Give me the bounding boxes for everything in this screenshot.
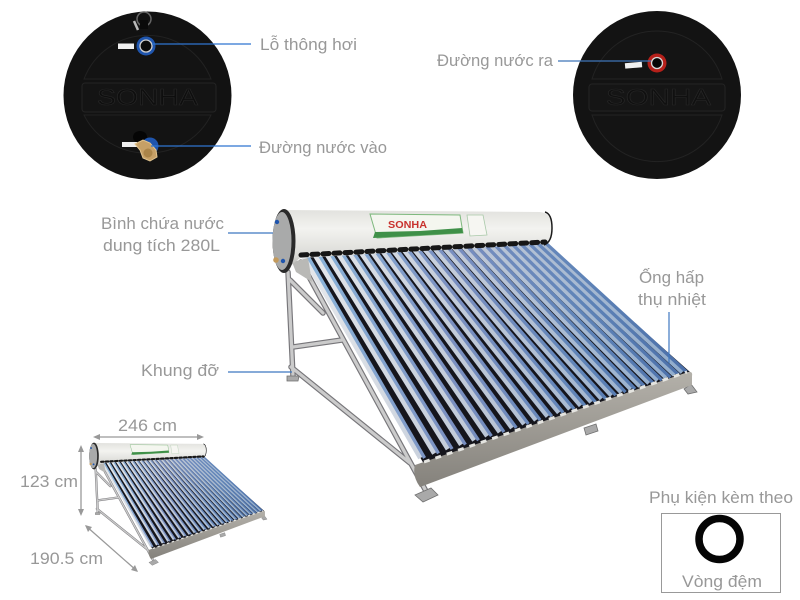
- callout: storage tank: [101, 214, 273, 255]
- embossed brand text: SONHA: [606, 84, 712, 110]
- callout: support frame: Khung đỡ: [141, 361, 219, 380]
- panel: accessory box: [662, 514, 780, 592]
- collector trough: [414, 372, 692, 487]
- accessory label: Vòng đệm: [682, 572, 762, 591]
- embossed brand band: [589, 84, 725, 111]
- tube collars: [301, 242, 545, 255]
- icon: air vent fitting: [118, 36, 156, 56]
- dimension label: height: 123 cm: [20, 472, 78, 491]
- mounting feet: [287, 376, 697, 502]
- tank end cap: [272, 209, 296, 273]
- embossed brand band: [82, 83, 216, 112]
- dimension arrow: depth: [85, 525, 138, 572]
- dimension arrow: width: [93, 434, 204, 440]
- storage tank body: [283, 210, 552, 272]
- tank support bracket: [292, 258, 312, 282]
- callout: absorber tubes: Ống hấp: [639, 267, 704, 287]
- embossed upper segment: [592, 31, 722, 79]
- dark backing behind the tubes: [302, 243, 690, 464]
- callout: absorber tubes: thụ nhiệt: [638, 290, 706, 309]
- icon: hanging handle: [134, 12, 151, 30]
- icon: brass water inlet: [122, 131, 158, 161]
- icon: black disc: [573, 11, 741, 179]
- callout: water inlet: Đường nước vào: [259, 138, 387, 157]
- panel: right tank end cap: [573, 11, 741, 179]
- embossed upper segment: [84, 35, 211, 79]
- dimension label: width: 246 cm: [118, 416, 177, 435]
- embossed lower segment: [84, 115, 211, 153]
- specification sticker: [467, 215, 487, 236]
- vacuum tubes: [304, 243, 687, 458]
- dimension arrow: height: [78, 445, 84, 516]
- small heater for dimensions: [89, 443, 267, 565]
- main sticker brand text: SONHA: [388, 220, 427, 231]
- callout: water outlet: Đường nước ra: [437, 51, 554, 70]
- callout: storage tank: Bình chứa nước: [101, 214, 224, 233]
- callout: absorber tubes: [638, 267, 706, 363]
- green product sticker: [370, 214, 463, 238]
- panel: left tank end cap: [64, 12, 232, 180]
- callout: air vent: Lỗ thông hơi: [260, 35, 357, 54]
- embossed lower segment: [592, 115, 722, 162]
- tube end caps: [424, 372, 687, 462]
- tank right end edge: [544, 212, 552, 245]
- dimension label: depth: 190.5 cm: [30, 549, 103, 568]
- icon: water outlet fitting: [625, 54, 666, 72]
- heading: included accessories: Phụ kiện kèm theo: [649, 488, 793, 507]
- icon: black disc: [64, 12, 232, 180]
- embossed brand text: SONHA: [97, 84, 199, 110]
- support frame: [288, 262, 427, 493]
- callout: storage tank: dung tích 280L: [103, 236, 220, 255]
- main solar water heater: [272, 209, 697, 502]
- icon: gasket ring: [699, 518, 740, 560]
